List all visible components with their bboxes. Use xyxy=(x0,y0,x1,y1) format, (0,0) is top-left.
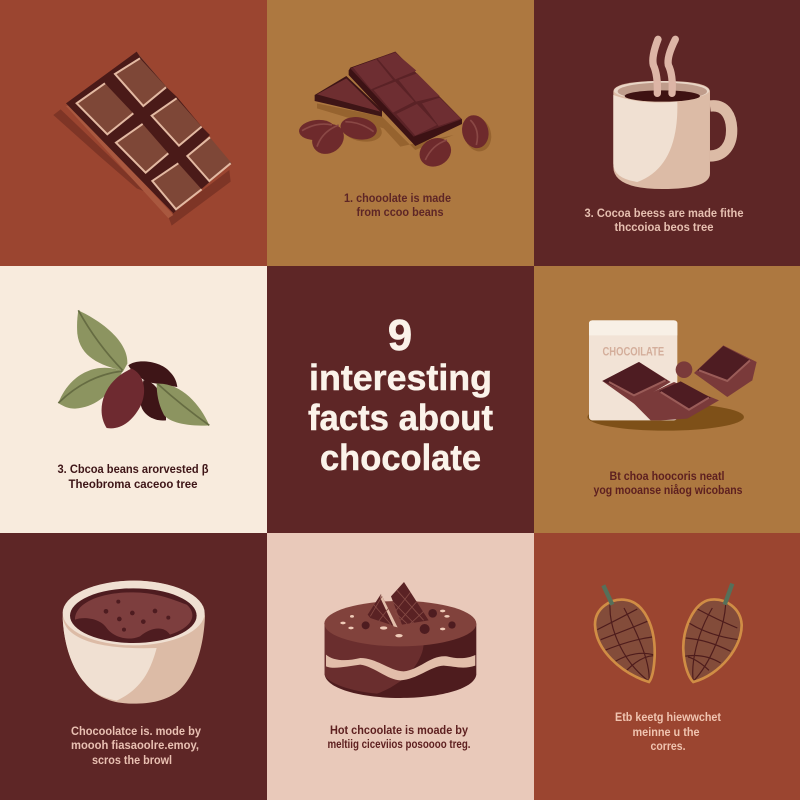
caption: bowl of chocolate: Chocoolatce is. mode by xyxy=(71,726,202,738)
caption: cocoa pod halves xyxy=(615,712,721,753)
panel: cocoa pods and leaves xyxy=(0,266,267,533)
icon: cocoa pods with leaves xyxy=(58,310,209,428)
panel: chocolate cake xyxy=(267,533,534,800)
title: 9 interesting facts about chocolate: interesting xyxy=(309,357,492,398)
icon: tilted chocolate bar xyxy=(53,52,232,226)
caption: fact 1 xyxy=(344,193,451,219)
icon: package and broken chocolate xyxy=(587,320,757,431)
caption: cocoa harvest xyxy=(58,464,208,491)
caption: chocolate cake: Hot chcoolate is moade by xyxy=(330,725,469,737)
caption: fact 1: from ccoo beans xyxy=(356,207,444,219)
title: 9 interesting facts about chocolate: chocolate xyxy=(320,437,481,478)
icon: bowl of chocolate xyxy=(63,581,205,704)
caption: cocoa harvest: 3. Cbcoa beans arorvested β xyxy=(58,464,208,476)
caption: bowl of chocolate: scros the browl xyxy=(92,755,172,767)
caption: cocoa pod halves: Etb keetg hiewwchet xyxy=(615,712,721,724)
panel: chocolate package xyxy=(534,266,800,533)
caption: fact 1: 1. chooolate is made xyxy=(344,193,451,205)
panel: cocoa pod halves xyxy=(534,533,800,800)
caption: cocoa harvest: Theobroma caceoo tree xyxy=(68,479,198,491)
caption: cocoa pod halves: meinne u the xyxy=(632,727,700,739)
icon: two cocoa pod halves xyxy=(595,584,742,682)
title: 9 interesting facts about chocolate: 9 xyxy=(388,311,412,360)
caption: chocolate cake: meltiig ciceviios posoooo treg. xyxy=(328,739,470,751)
panel: mug fact xyxy=(534,0,800,266)
caption: mug fact: 3. Cocoa beess are made fithe xyxy=(584,208,744,220)
caption: mug fact: thccoioa beos tree xyxy=(614,222,714,234)
caption: bowl of chocolate xyxy=(71,726,202,767)
title: 9 interesting facts about chocolate: facts about xyxy=(308,397,493,438)
caption: mug fact xyxy=(584,208,744,234)
panel: fact 1 xyxy=(267,0,534,266)
panel: bowl of chocolate xyxy=(0,533,267,800)
panel: chocolate bar xyxy=(0,0,267,266)
caption: chocolate package: yog mooanse niåog wicobans xyxy=(594,485,742,497)
icon: chocolate bars and beans xyxy=(298,52,495,172)
icon: layered chocolate cake xyxy=(324,582,476,698)
caption: bowl of chocolate: moooh fiasaoolre.emoy, xyxy=(71,740,199,752)
caption: chocolate package xyxy=(594,471,742,497)
caption: cocoa pod halves: corres. xyxy=(650,741,686,753)
caption: chocolate cake xyxy=(328,725,470,751)
icon: package and broken chocolate: CHOCOILATE xyxy=(602,344,664,358)
title: 9 interesting facts about chocolate xyxy=(308,311,493,478)
caption: chocolate package: Bt choa hoocoris neatl xyxy=(610,471,724,483)
panel: title xyxy=(267,266,534,533)
icon: steaming mug xyxy=(613,39,732,189)
